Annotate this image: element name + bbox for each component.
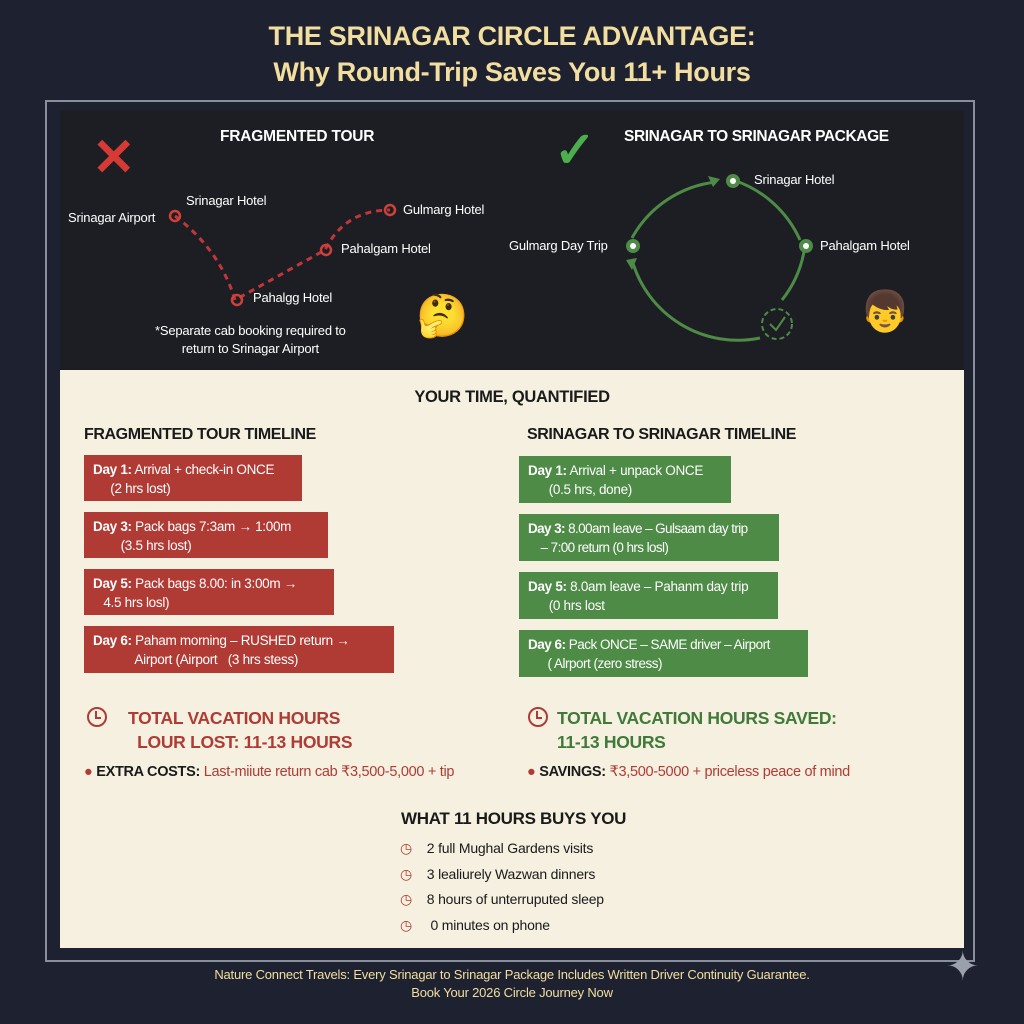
red timeline boxes: (3.5 hrs lost) <box>121 538 191 553</box>
green timeline boxes: Day 6: Pack ONCE – SAME driver – Airport <box>528 637 770 652</box>
red timeline boxes: Day 3: Pack bags 7:3am → 1:00m <box>93 519 291 534</box>
red timeline boxes: 4.5 hrs losl) <box>103 595 169 610</box>
panel: route comparison: Srinagar Hotel <box>754 172 834 187</box>
icon: thinking emoji: 🤔 <box>416 292 468 339</box>
green timeline boxes <box>519 456 808 677</box>
title: Why Round-Trip Saves You 11+ Hours <box>273 57 751 87</box>
heading: srinagar timeline: SRINAGAR TO SRINAGAR TIMELINE <box>527 426 796 443</box>
note: return to Srinagar Airport <box>182 341 319 356</box>
red timeline boxes <box>84 455 394 673</box>
panel: route comparison <box>60 110 964 370</box>
red timeline boxes: Day 5: Pack bags 8.00: in 3:00m → <box>93 576 297 591</box>
diagram: circle route <box>626 174 813 342</box>
total saved: 11-13 HOURS <box>557 732 666 752</box>
list <box>400 840 604 933</box>
green timeline boxes: (0 hrs lost <box>549 598 605 613</box>
panel: route comparison: Pahalgam Hotel <box>820 238 910 253</box>
map: fragmented route <box>168 204 396 306</box>
note: *Separate cab booking required to <box>155 323 346 338</box>
green timeline boxes: Day 1: Arrival + unpack ONCE <box>528 463 703 478</box>
footer <box>214 967 810 1000</box>
red timeline boxes: Day 6: Paham morning – RUSHED return → <box>93 633 349 648</box>
panel: route comparison: Gulmarg Hotel <box>403 202 484 217</box>
green timeline boxes: – 7:00 return (0 hrs losl) <box>541 540 668 555</box>
green timeline boxes: Day 5: 8.0am leave – Pahanm day trip <box>528 579 748 594</box>
panel: route comparison: Gulmarg Day Trip <box>509 238 608 253</box>
savings: ● SAVINGS: ₹3,500-5000 + priceless peace of mind <box>527 764 850 780</box>
list: ◷ 2 full Mughal Gardens visits <box>400 840 593 856</box>
panel: route comparison: Pahalgam Hotel <box>341 241 431 256</box>
frame <box>45 100 975 962</box>
total lost <box>87 707 352 752</box>
icon: clock <box>528 707 548 727</box>
title: THE SRINAGAR CIRCLE ADVANTAGE: <box>268 21 756 51</box>
red timeline boxes: (2 hrs lost) <box>110 481 170 496</box>
green timeline boxes: Day 3: 8.00am leave – Gulsaam day trip <box>528 521 748 536</box>
total lost: LOUR LOST: 11-13 HOURS <box>137 732 352 752</box>
list: ◷ 8 hours of unterruputed sleep <box>400 891 604 907</box>
panel: route comparison: Srinagar Hotel <box>186 193 266 208</box>
extra costs: ● EXTRA COSTS: Last-miiute return cab ₹3,500-5,000 + tip <box>84 764 454 780</box>
heading: fragmented timeline: FRAGMENTED TOUR TIMELINE <box>84 426 316 443</box>
total saved <box>528 707 837 752</box>
green timeline boxes: (0.5 hrs, done) <box>549 482 632 497</box>
icon: red cross: ✕ <box>92 129 136 187</box>
total saved: TOTAL VACATION HOURS SAVED: <box>557 708 837 728</box>
list: ◷ 3 lealiurely Wazwan dinners <box>400 866 595 882</box>
panel: route comparison: Pahalgg Hotel <box>253 290 332 305</box>
heading: YOUR TIME, QUANTIFIED <box>414 388 610 406</box>
panel: time quantified <box>60 370 964 948</box>
panel: route comparison: Srinagar Airport <box>68 210 155 225</box>
icon: green check: ✓ <box>554 122 596 178</box>
green timeline boxes: ( Alrport (zero stress) <box>548 656 662 671</box>
icon: man emoji: 👦 <box>860 290 910 334</box>
footer: Book Your 2026 Circle Journey Now <box>411 985 613 1000</box>
red timeline boxes: Airport (Airport (3 hrs stess) <box>134 652 298 667</box>
total lost: TOTAL VACATION HOURS <box>128 708 340 728</box>
list: ◷ 0 minutes on phone <box>400 916 550 932</box>
title <box>268 21 756 87</box>
red timeline boxes: Day 1: Arrival + check-in ONCE <box>93 462 274 477</box>
note <box>155 323 346 356</box>
heading: what 11 hours buys: WHAT 11 HOURS BUYS YOU <box>401 809 626 828</box>
icon: sparkle: ✦ <box>946 945 980 989</box>
heading: package: SRINAGAR TO SRINAGAR PACKAGE <box>624 128 889 145</box>
icon: clock <box>87 707 107 727</box>
footer: Nature Connect Travels: Every Srinagar to Srinagar Package Includes Written Driver Continuity Guarantee. <box>214 967 810 982</box>
heading: fragmented tour: FRAGMENTED TOUR <box>220 128 374 145</box>
